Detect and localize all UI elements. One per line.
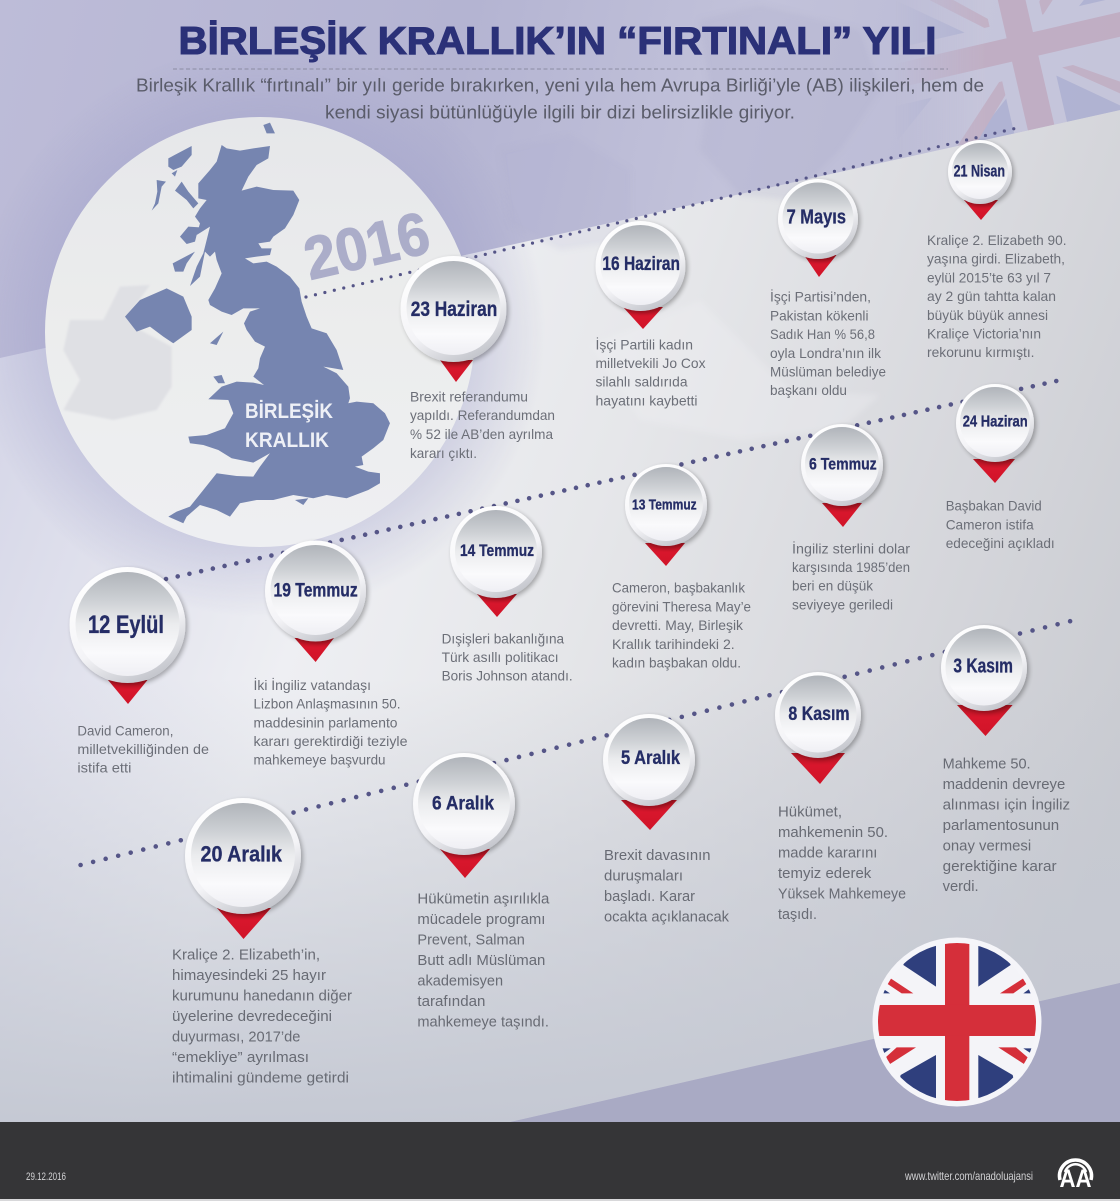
event: 12 Eylül: 12 Eylül	[88, 611, 164, 639]
description: hayatını kaybetti	[596, 392, 698, 408]
icon: round UK flag	[872, 937, 1043, 1107]
description: mahkemeye taşındı.	[417, 1013, 549, 1030]
description: duyurması, 2017’de	[172, 1028, 300, 1045]
event: 3 Kasım: 3 Kasım	[953, 656, 1013, 678]
description: mücadele programı	[417, 911, 545, 928]
description	[946, 498, 1055, 551]
description: ocakta açıklanacak	[604, 908, 729, 926]
description: onay vermesi	[943, 837, 1031, 854]
description	[596, 335, 706, 408]
description: görevini Theresa May’e	[612, 598, 751, 614]
event: 19 Temmuz	[254, 540, 408, 768]
description: rekorunu kırmıştı.	[927, 344, 1034, 360]
description: Boris Johnson atandı.	[442, 668, 573, 684]
event: 7 Mayıs: 7 Mayıs	[787, 206, 846, 228]
event: 8 Kasım	[775, 672, 906, 923]
event: 23 Haziran: 23 Haziran	[411, 298, 497, 321]
description: Pakistan kökenli	[770, 307, 868, 323]
description: devretti. May, Birleşik	[612, 617, 744, 633]
description	[442, 630, 573, 684]
description: Brexit referandumu	[410, 389, 528, 405]
event: 3 Kasım	[941, 625, 1070, 895]
description: İşçi Partisi’nden,	[770, 288, 871, 305]
description: kurumunu hanedanın diğer	[172, 987, 352, 1004]
map label: KRALLIK	[245, 429, 329, 452]
description	[770, 288, 886, 398]
description	[943, 755, 1070, 895]
date: 29.12.2016	[26, 1171, 66, 1183]
timeline dotted line 1	[306, 127, 1021, 297]
description: üyelerine devredeceğini	[172, 1008, 332, 1025]
description: alınması için İngiliz	[943, 795, 1070, 813]
description: maddesinin parlamento	[254, 714, 398, 730]
description: Sadık Han % 56,8	[770, 326, 875, 342]
description	[927, 232, 1066, 360]
description	[612, 580, 751, 670]
description: duruşmaları	[604, 868, 683, 884]
event: 6 Aralık: 6 Aralık	[432, 793, 494, 814]
description: Dışişleri bakanlığına	[442, 630, 564, 646]
description: seviyeye geriledi	[792, 596, 893, 612]
description: silahlı saldırıda	[596, 374, 688, 390]
event: 16 Haziran	[596, 221, 706, 408]
description: taşıdı.	[778, 906, 817, 923]
description: İngiliz sterlini dolar	[792, 539, 910, 556]
description: Lizbon Anlaşmasının 50.	[254, 696, 400, 712]
event: 19 Temmuz: 19 Temmuz	[274, 581, 358, 602]
event: 20 Aralık: 20 Aralık	[200, 842, 283, 867]
event: 7 Mayıs	[770, 179, 886, 398]
description: mahkemeye başvurdu	[254, 752, 386, 768]
twitter url: www.twitter.com/anadoluajansi	[904, 1169, 1033, 1183]
description: Türk asıllı politikacı	[442, 649, 559, 665]
description: Butt adlı Müslüman	[417, 952, 545, 969]
description	[604, 847, 729, 926]
event: 21 Nisan: 21 Nisan	[954, 162, 1005, 181]
description: milletvekilliğinden de	[77, 741, 209, 757]
subtitle	[136, 69, 984, 122]
description: ihtimalini gündeme getirdi	[172, 1069, 349, 1086]
icon: AA logo: AA	[1060, 1165, 1092, 1193]
description: Kraliçe 2. Elizabeth’in,	[172, 946, 320, 963]
description	[172, 946, 352, 1086]
description	[77, 722, 209, 776]
map: Ireland	[63, 285, 172, 420]
description: ay 2 gün tahtta kalan	[927, 288, 1056, 304]
description: büyük büyük annesi	[927, 307, 1048, 323]
description: başladı. Karar	[604, 888, 695, 905]
event: 23 Haziran	[400, 256, 555, 461]
map label: BİRLEŞİK	[245, 400, 333, 423]
footer bar	[0, 1122, 1120, 1201]
description: İşçi Partili kadın	[596, 335, 693, 352]
description: David Cameron,	[77, 722, 173, 738]
description: temyiz ederek	[778, 865, 872, 882]
event: 6 Aralık	[413, 753, 550, 1030]
description: Yüksek Mahkemeye	[778, 886, 906, 903]
description: Prevent, Salman	[417, 931, 525, 948]
description: milletvekili Jo Cox	[596, 355, 706, 371]
description: istifa etti	[77, 760, 131, 776]
description: Cameron istifa	[946, 516, 1034, 532]
description: “emekliye” ayrılması	[172, 1049, 309, 1066]
event: 5 Aralık: 5 Aralık	[621, 748, 680, 769]
description: mahkemenin 50.	[778, 824, 888, 841]
title: BİRLEŞİK KRALLIK’IN “FIRTINALI” YILI	[178, 20, 936, 63]
event: 6 Temmuz	[792, 424, 910, 612]
description: kararı çıktı.	[410, 445, 477, 461]
description: Başbakan David	[946, 498, 1042, 514]
description: kadın başbakan oldu.	[612, 654, 741, 670]
description: % 52 ile AB’den ayrılma	[410, 426, 553, 442]
description: Mahkeme 50.	[943, 755, 1031, 772]
event: 24 Haziran: 24 Haziran	[963, 414, 1028, 431]
description: Kraliçe Victoria’nın	[927, 326, 1041, 342]
description: himayesindeki 25 hayır	[172, 967, 326, 984]
description: İki İngiliz vatandaşı	[254, 676, 371, 693]
description: Müslüman belediye	[770, 364, 886, 380]
timeline dotted line 2	[166, 379, 1066, 579]
event: 14 Temmuz	[442, 506, 573, 684]
description: maddenin devreye	[943, 776, 1065, 793]
subtitle: Birleşik Krallık “fırtınalı” bir yılı geride bırakırken, yeni yıla hem Avrupa Birliği’yle (AB) ilişkileri, hem de	[136, 75, 984, 96]
event: 8 Kasım: 8 Kasım	[788, 704, 850, 725]
description: akademisyen	[417, 972, 503, 989]
event: 13 Temmuz	[612, 464, 751, 670]
description: verdi.	[943, 878, 979, 895]
description: edeceğini açıkladı	[946, 535, 1055, 551]
description	[254, 676, 408, 768]
description: beri en düşük	[792, 578, 874, 594]
description: Brexit davasının	[604, 847, 710, 864]
description	[417, 890, 550, 1030]
description: Kraliçe 2. Elizabeth 90.	[927, 232, 1066, 248]
event: 20 Aralık	[172, 798, 352, 1086]
event: 14 Temmuz: 14 Temmuz	[460, 541, 534, 560]
description: oyla Londra’nın ilk	[770, 345, 882, 361]
description: kararı gerektirdiği teziyle	[254, 733, 408, 749]
description: Hükümet,	[778, 804, 842, 821]
event: 6 Temmuz: 6 Temmuz	[809, 454, 877, 473]
event: 24 Haziran	[946, 384, 1055, 551]
description: parlamentosunun	[943, 817, 1059, 834]
description: Cameron, başbakanlık	[612, 580, 746, 596]
year 2016: 2016	[298, 199, 436, 293]
description: madde kararını	[778, 845, 877, 862]
description: Krallık tarihindeki 2.	[612, 636, 735, 652]
description: tarafından	[417, 993, 485, 1010]
description: gerektiğine karar	[943, 858, 1057, 875]
description	[778, 804, 906, 923]
subtitle: kendi siyasi bütünlüğüyle ilgili bir dizi belirsizlikle giriyor.	[325, 102, 795, 122]
description: eylül 2015’te 63 yıl 7	[927, 269, 1051, 285]
description: karşısında 1985’den	[792, 559, 910, 575]
event: 13 Temmuz: 13 Temmuz	[632, 496, 697, 513]
event: 16 Haziran: 16 Haziran	[602, 254, 680, 275]
description	[410, 389, 555, 461]
event: 21 Nisan	[927, 140, 1066, 360]
faded flag background	[933, 0, 1120, 146]
map label	[245, 400, 333, 452]
description: Hükümetin aşırılıkla	[417, 890, 550, 907]
event: 12 Eylül	[70, 567, 209, 776]
timeline dotted line 3	[81, 619, 1079, 865]
map: United Kingdom	[125, 123, 390, 523]
event: 5 Aralık	[603, 714, 729, 926]
description: yaşına girdi. Elizabeth,	[927, 251, 1065, 267]
description: yapıldı. Referandumdan	[410, 407, 555, 423]
description	[792, 539, 910, 612]
UK map disc	[45, 117, 475, 547]
description: başkanı oldu	[770, 382, 847, 398]
